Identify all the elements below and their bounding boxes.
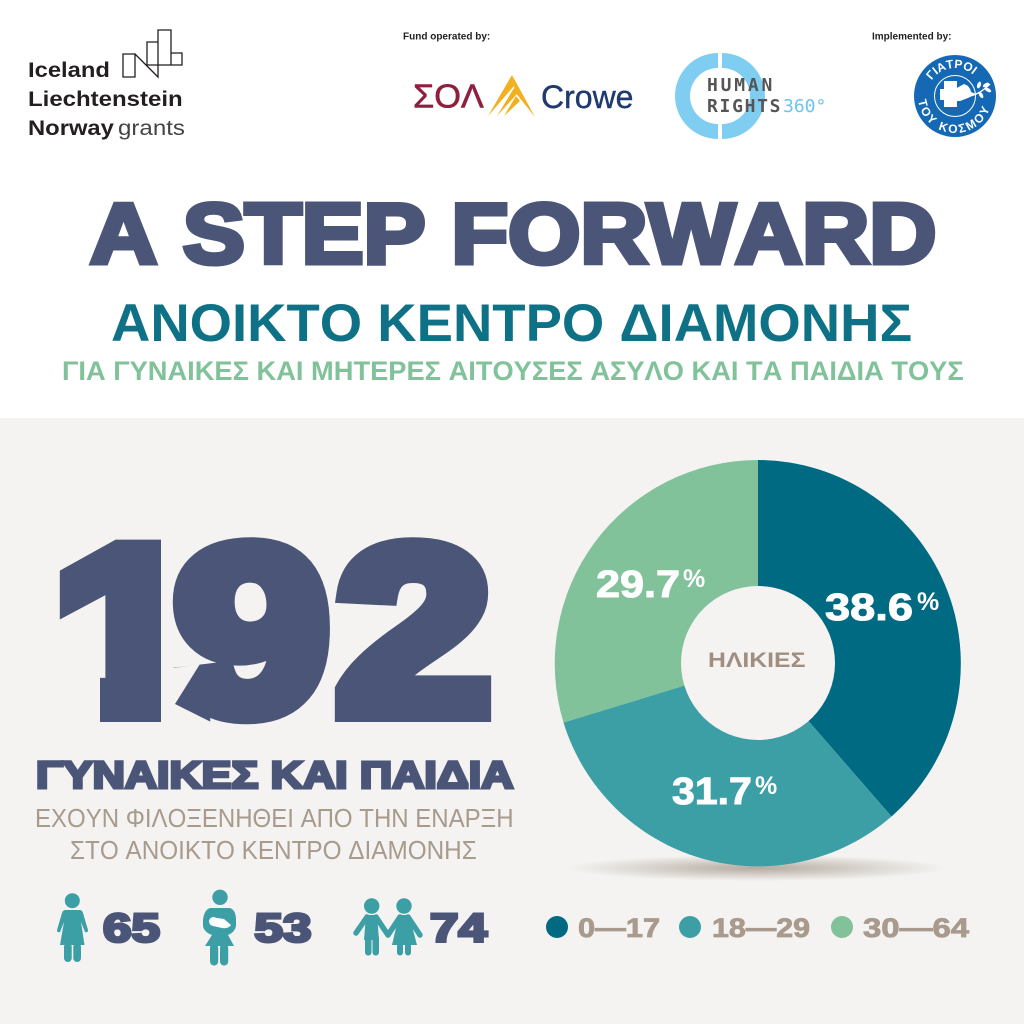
logo: Giatroi tou Kosmou: ΤΟΥ ΚΟΣΜΟΥ [918, 98, 988, 133]
logo: Human Rights 360: RIGHTS [707, 96, 782, 117]
logo: Human Rights 360: 360° [783, 96, 826, 117]
subtitle: ΑΝΟΙΚΤΟ ΚΕΝΤΡΟ ΔΙΑΜΟΝΗΣ [111, 294, 912, 353]
panel: statistics background [0, 418, 1024, 1024]
value: 38.6%: 38.6 [825, 585, 913, 628]
description text: ΕΧΟΥΝ ΦΙΛΟΞΕΝΗΘΕΙ ΑΠΟ ΤΗΝ ΕΝΑΡΞΗ [35, 804, 514, 833]
value: 38.6%: % [917, 588, 939, 616]
label: fund operated by: Fund operated by: [403, 32, 490, 42]
logo: Giatroi tou Kosmou: ΓΙΑΤΡΟΙ [926, 60, 978, 80]
value: 29.7%: % [683, 565, 705, 593]
logo: Giatroi tou Kosmou [914, 55, 996, 137]
logo: SOL Crowe [413, 75, 633, 117]
pie shadow [567, 855, 947, 881]
title: A STEP FORWARD [90, 186, 936, 281]
slice: 30-64 [555, 460, 758, 722]
label: implemented by: Implemented by: [872, 32, 951, 42]
logo: SOL Crowe: Crowe [541, 79, 633, 115]
value: 29.7%: 29.7 [596, 562, 680, 605]
legend [546, 914, 969, 944]
pie chart: ages [555, 460, 961, 866]
logo: Human Rights 360 [675, 53, 826, 139]
stat: mothers 53: 53 [254, 905, 311, 950]
slice: 0-17 [758, 460, 961, 816]
value: 31.7%: 31.7 [672, 770, 752, 813]
stat: children 74 [356, 898, 487, 956]
pie centre hole [681, 586, 835, 740]
legend: 18—29 [712, 914, 810, 944]
stat: women 65 [57, 893, 160, 962]
logo: Iceland Liechtenstein Norway grants: Liechtenstein [28, 87, 183, 111]
legend: 0—17 [578, 914, 660, 944]
label: ages: ΗΛΙΚΙΕΣ [708, 648, 806, 672]
logo: Iceland Liechtenstein Norway grants: Iceland [28, 58, 110, 82]
heading: women and children: ΓΥΝΑΙΚΕΣ ΚΑΙ ΠΑΙΔΙΑ [36, 753, 513, 796]
slice: 18-29 [564, 663, 892, 866]
logo: Iceland Liechtenstein Norway grants [28, 30, 185, 140]
big number 192: 192 [53, 499, 491, 763]
value: 31.7%: % [755, 772, 777, 800]
logo: Iceland Liechtenstein Norway grants: Norway [28, 116, 114, 140]
stat: mothers 53 [203, 890, 311, 966]
description text: ΣΤΟ ΑΝΟΙΚΤΟ ΚΕΝΤΡΟ ΔΙΑΜΟΝΗΣ [70, 836, 477, 865]
stat: children 74: 74 [430, 905, 487, 950]
description text [35, 804, 514, 865]
logo: Human Rights 360: HUMAN [707, 75, 775, 96]
tagline: ΓΙΑ ΓΥΝΑΙΚΕΣ ΚΑΙ ΜΗΤΕΡΕΣ ΑΙΤΟΥΣΕΣ ΑΣΥΛΟ ΚΑΙ ΤΑ ΠΑΙΔΙΑ ΤΟΥΣ [62, 355, 964, 386]
logo: Iceland Liechtenstein Norway grants: grants [118, 116, 185, 140]
logo: SOL Crowe: ΣΟΛ [413, 79, 484, 115]
stat: women 65: 65 [103, 905, 160, 950]
legend: 30—64 [863, 914, 969, 943]
